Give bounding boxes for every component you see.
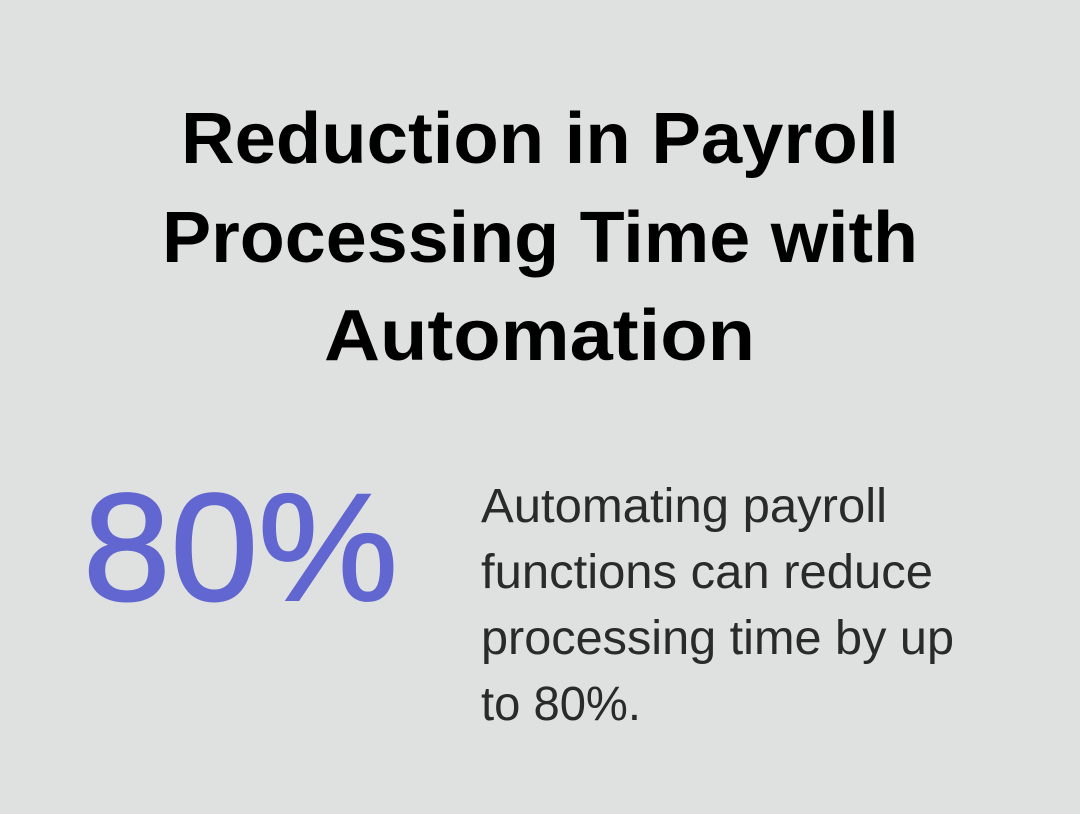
title: Reduction in Payroll	[181, 99, 899, 179]
description text: processing time by up	[481, 612, 954, 665]
title: Automation	[324, 296, 755, 376]
statistic: 80%: 80%	[83, 462, 398, 633]
title: Processing Time with	[162, 198, 918, 278]
description text	[481, 480, 954, 731]
title	[162, 99, 918, 376]
description text: functions can reduce	[481, 546, 933, 599]
description text: to 80%.	[481, 678, 641, 731]
description text: Automating payroll	[481, 480, 887, 533]
